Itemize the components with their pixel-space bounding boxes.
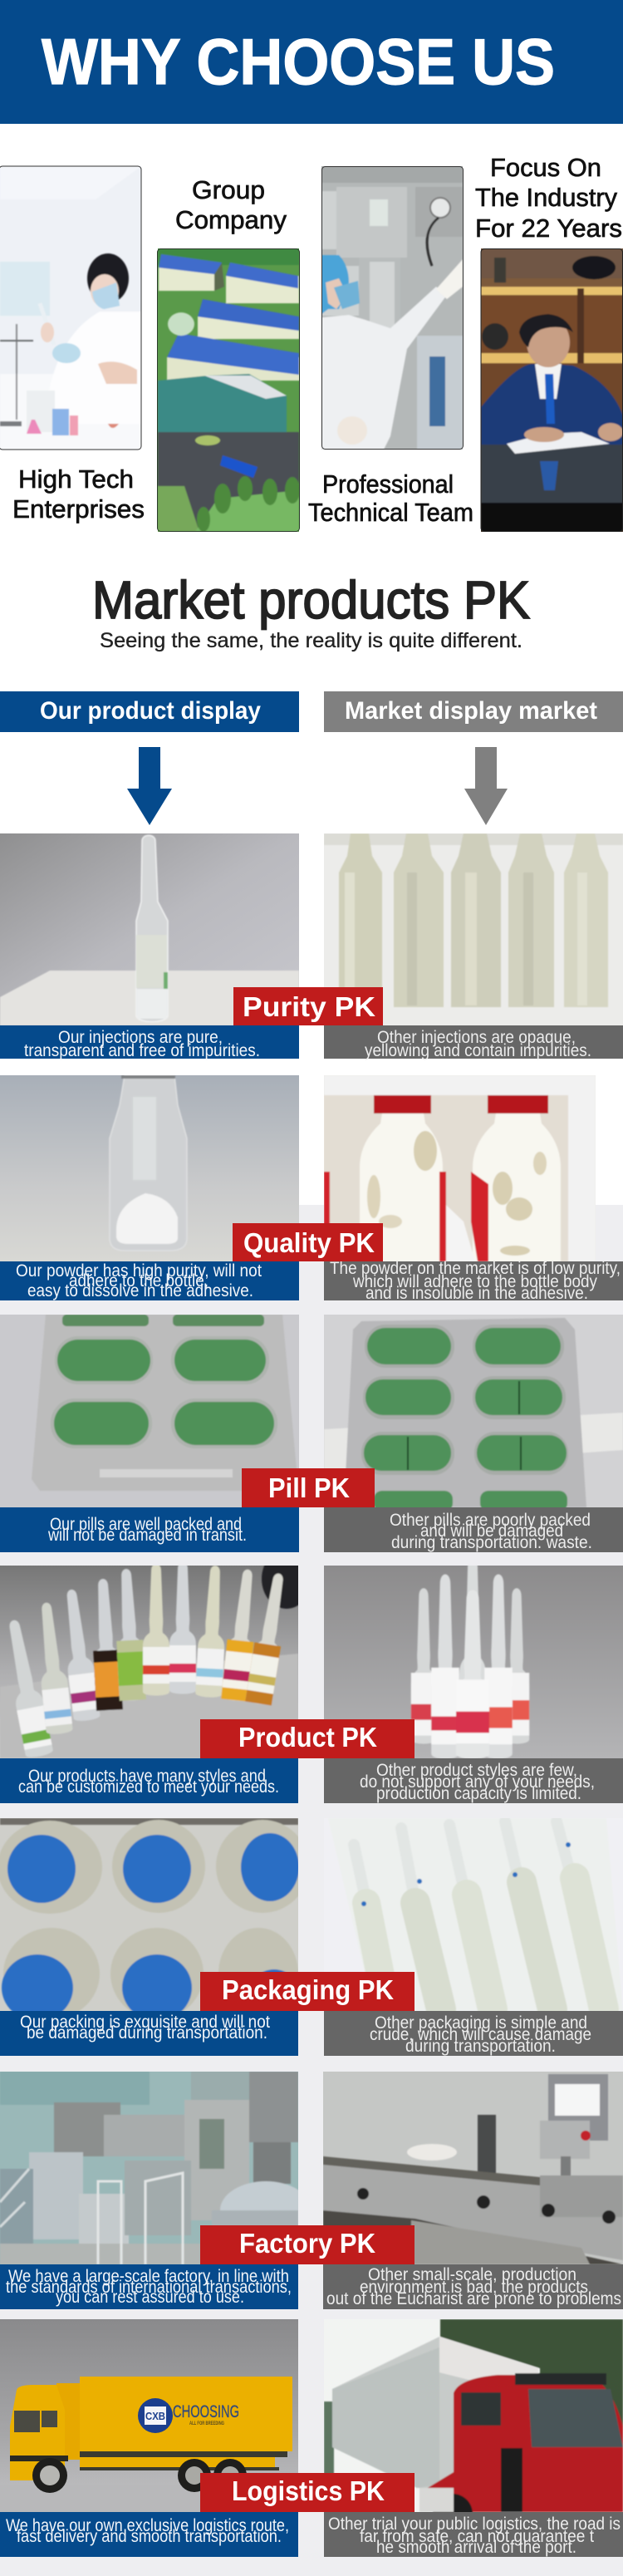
badge: product PK	[200, 1719, 415, 1758]
caption: our powder: easy to dissolve in the adhesive.	[27, 1281, 253, 1300]
badge: quality PK: Quality PK	[243, 1227, 375, 1258]
caption: our packing: Our packing is exquisite and will not	[20, 2013, 270, 2032]
banner: why choose us	[0, 0, 623, 124]
caption: market factory	[323, 2264, 623, 2309]
label: high tech enterprises: Enterprises	[12, 494, 145, 524]
caption: our purity	[0, 1025, 299, 1060]
label: professional technical team	[308, 469, 473, 527]
truck logo	[138, 2398, 239, 2433]
panel: purity PK	[0, 833, 623, 1060]
caption: market styles: production capacity is limited.	[376, 1784, 581, 1803]
caption: our purity: Our injections are pure,	[58, 1028, 223, 1047]
photo: our blue capped vials	[0, 1818, 298, 2011]
title: WHY CHOOSE US	[42, 25, 555, 98]
caption: market styles: do not support any of your needs,	[360, 1772, 595, 1792]
caption: market pills: during transportation. waste.	[391, 1533, 592, 1552]
label: focus on the industry: The Industry	[475, 183, 617, 212]
caption: market purity	[324, 1025, 623, 1060]
panel: logistics PK	[0, 2319, 623, 2557]
caption: our logistics: We have our own exclusive logistics route,	[6, 2516, 289, 2535]
subheading: Seeing the same, the reality is quite different.	[100, 629, 522, 652]
caption: market packing: Other packaging is simple and	[375, 2013, 587, 2033]
photo: our powder vial	[0, 1075, 299, 1261]
truck logo: CXB	[145, 2410, 165, 2422]
truck logo: CHOOSING	[173, 2402, 239, 2421]
label: professional technical team: Professional	[322, 469, 454, 499]
caption: our powder: Our powder has high purity, will not	[16, 1261, 262, 1281]
caption: our factory: the standards of international transactions,	[6, 2278, 292, 2297]
caption: market logistics: far from safe, can not guarantee t	[360, 2527, 594, 2546]
caption: market purity: Other injections are opaque,	[377, 1028, 576, 1047]
label: focus on the industry: Focus On	[490, 153, 601, 182]
photo: technical team	[321, 166, 463, 450]
caption: market styles: Other product styles are few,	[376, 1761, 577, 1780]
panel: packaging PK	[0, 1818, 623, 2056]
truck logo: ALL FOR BREEDING	[189, 2421, 224, 2426]
panel: product PK	[0, 1549, 623, 1803]
photo: market red truck	[324, 2319, 623, 2512]
caption: market powder: which will adhere to the bottle body	[352, 1272, 597, 1291]
caption: market purity: yellowing and contain impurities.	[365, 1041, 591, 1060]
panel: company strengths	[0, 153, 623, 532]
caption: our packing: be damaged during transportation.	[27, 2023, 267, 2043]
caption: market styles	[324, 1758, 623, 1803]
photo: market damaged blister pack	[324, 1315, 623, 1507]
caption: our styles: Our products have many styles and	[28, 1767, 266, 1786]
photo: market small machine	[323, 2072, 623, 2264]
photo: market clumped powder vials	[324, 1075, 596, 1261]
caption: our packing	[0, 2011, 298, 2056]
caption: market pills: Other pills are poorly packed	[390, 1511, 591, 1530]
heading: market products PK	[92, 570, 530, 652]
caption: market powder	[324, 1259, 623, 1303]
badge: purity PK: Purity PK	[243, 991, 375, 1022]
photo: market crude tray	[348, 1818, 620, 2011]
caption: market logistics	[324, 2512, 623, 2557]
badge: packaging PK: Packaging PK	[222, 1974, 394, 2005]
label: group company: Company	[175, 205, 287, 234]
badge: pill PK	[242, 1468, 375, 1507]
badge: packaging PK	[200, 1972, 415, 2011]
badge: purity PK	[233, 987, 383, 1025]
photo: our clear ampoule	[0, 833, 299, 1025]
badge: logistics PK	[200, 2473, 415, 2512]
caption: market packing: crude, which will cause damage	[370, 2025, 591, 2044]
caption: our purity: transparent and free of impurities.	[24, 1041, 260, 1060]
caption: our factory	[0, 2264, 298, 2309]
caption: our styles: can be customized to meet your needs.	[18, 1777, 279, 1797]
caption: our powder	[0, 1261, 299, 1300]
label: focus on the industry: For 22 Years	[475, 214, 622, 243]
caption: market pills: and will be damaged	[420, 1522, 563, 1541]
caption: our styles	[0, 1758, 298, 1803]
column header: our product display: Our product display	[40, 697, 261, 725]
caption: market pills	[324, 1507, 623, 1552]
photo: founder at desk	[481, 248, 623, 532]
caption: market factory: environment is bad, the products	[360, 2278, 588, 2297]
caption: our factory: you can rest assured to use.	[56, 2288, 244, 2307]
arrow: our products	[127, 747, 172, 825]
caption: our factory: We have a large-scale factory, in line with	[8, 2267, 289, 2286]
label: high tech enterprises: High Tech	[18, 465, 134, 494]
label: professional technical team: Technical Team	[308, 498, 473, 527]
panel: quality PK	[0, 1075, 623, 1303]
column header: our product display	[0, 691, 299, 732]
photo: our intact blister pack	[0, 1315, 299, 1507]
badge: product PK: Product PK	[238, 1722, 377, 1753]
label: group company: Group	[192, 175, 265, 204]
caption: market logistics: he smooth arrival of the port.	[376, 2538, 576, 2557]
caption: market packing	[324, 2011, 623, 2056]
label: focus on the industry	[475, 153, 622, 243]
caption: our pills: Our pills are well packed and	[50, 1515, 242, 1534]
badge: factory PK: Factory PK	[239, 2228, 375, 2259]
photo: our large factory	[0, 2072, 298, 2264]
caption: our pills: will not be damaged in transit.	[47, 1526, 247, 1545]
photo: our ten ampoule styles	[0, 1566, 298, 1758]
caption: market factory: Other small-scale, production	[368, 2265, 576, 2284]
column header: market display market: Market display market	[345, 697, 597, 725]
photo: market few ampoules	[324, 1566, 623, 1758]
photo: market yellowed ampoules	[324, 833, 623, 1025]
caption: our logistics	[0, 2512, 298, 2557]
photo: our yellow truck	[0, 2319, 298, 2512]
caption: market packing: during transportation.	[405, 2037, 556, 2056]
heading: market products PK: Market products PK	[92, 570, 530, 630]
badge: logistics PK: Logistics PK	[232, 2475, 385, 2506]
panel: factory PK	[0, 2072, 623, 2309]
badge: pill PK: Pill PK	[268, 1472, 350, 1503]
label: high tech enterprises	[12, 465, 145, 524]
caption: our logistics: fast delivery and smooth transportation.	[17, 2527, 282, 2546]
column header: market display market	[324, 691, 623, 732]
arrow: market products	[464, 747, 508, 825]
label: group company	[175, 175, 287, 234]
panel: pill PK	[0, 1315, 623, 1552]
caption: our pills	[0, 1507, 299, 1552]
photo: group company campus	[158, 248, 299, 532]
caption: market powder: and is insoluble in the adhesive.	[365, 1284, 588, 1303]
photo: high tech laboratory	[0, 166, 141, 450]
badge: factory PK	[200, 2225, 415, 2264]
caption: our powder: adhere to the bottle,	[69, 1271, 208, 1290]
